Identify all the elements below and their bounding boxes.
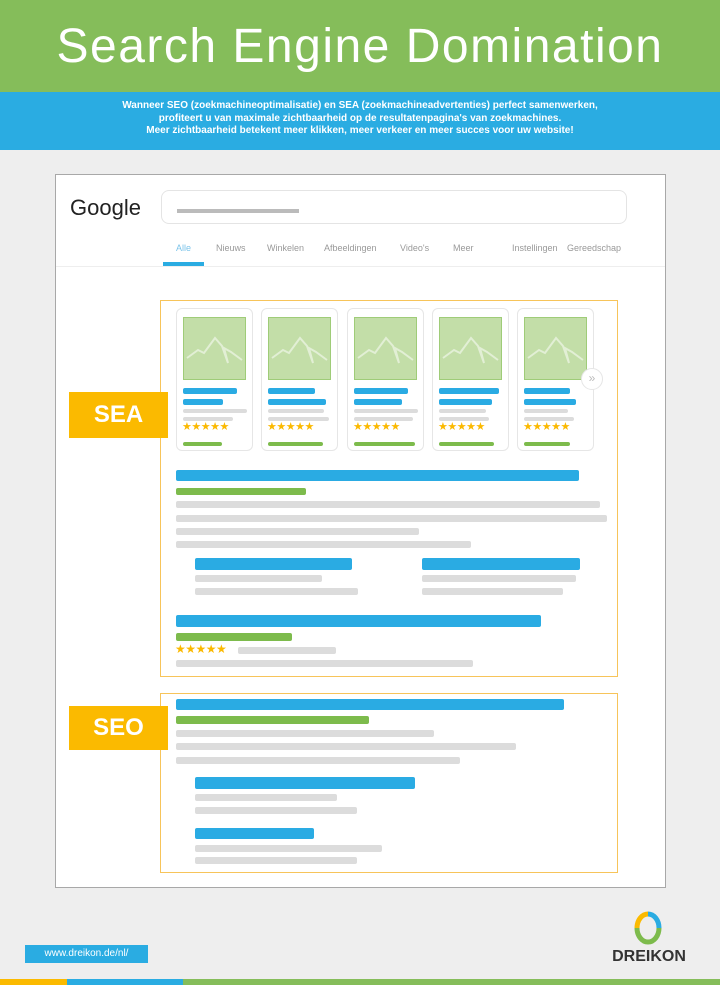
SEO label: SEO (93, 714, 144, 741)
navigation tabs (56, 238, 665, 267)
navigation tabs: Afbeeldingen (324, 243, 377, 253)
intro text: Meer zichtbaarheid betekent meer klikken, meer verkeer en meer succes voor uw website! (146, 125, 574, 136)
product cards (176, 308, 603, 451)
product cards: ★★★★★ (182, 421, 229, 433)
navigation tabs: Winkelen (267, 243, 304, 253)
icon: next arrow: » (589, 371, 595, 385)
SEO label (69, 706, 168, 750)
logo: DREIKON (612, 912, 686, 965)
navigation tabs: Nieuws (216, 243, 246, 253)
google logo: Google (70, 195, 141, 220)
website url badge (25, 945, 148, 963)
navigation tabs: Instellingen (512, 243, 558, 253)
SEA label (69, 392, 168, 438)
navigation tabs: Video's (400, 243, 429, 253)
SEO organic result (176, 699, 564, 864)
navigation tabs: Gereedschap (567, 243, 621, 253)
SEA label: SEA (94, 401, 143, 428)
panel: google results page (55, 174, 666, 888)
intro text (122, 100, 598, 136)
icon: logo ring (634, 912, 662, 944)
panel: SEA box (160, 300, 618, 677)
bottom stripe (0, 979, 720, 985)
header: title band (0, 0, 720, 92)
SEA ad result: ★★★★★ (175, 642, 226, 656)
product cards: ★★★★★ (353, 421, 400, 433)
website url badge: www.dreikon.de/nl/ (45, 948, 128, 959)
product cards: ★★★★★ (267, 421, 314, 433)
product cards: ★★★★★ (523, 421, 570, 433)
navigation tabs: Alle (176, 243, 191, 253)
intro text: profiteert u van maximale zichtbaarheid op de resultatenpagina's van zoekmachines. (159, 112, 561, 124)
intro band (0, 92, 720, 150)
search box (161, 190, 627, 224)
product cards: ★★★★★ (438, 421, 485, 433)
panel: SEO box (160, 693, 618, 873)
logo: DREIKON: DREIKON (612, 948, 686, 965)
SEA ad result (175, 470, 607, 667)
title: Search Engine Domination (56, 20, 664, 73)
intro text: Wanneer SEO (zoekmachineoptimalisatie) en SEA (zoekmachineadvertenties) perfect samenwerken, (122, 100, 598, 111)
navigation tabs: Meer (453, 243, 474, 253)
icon: next arrow (581, 368, 603, 390)
